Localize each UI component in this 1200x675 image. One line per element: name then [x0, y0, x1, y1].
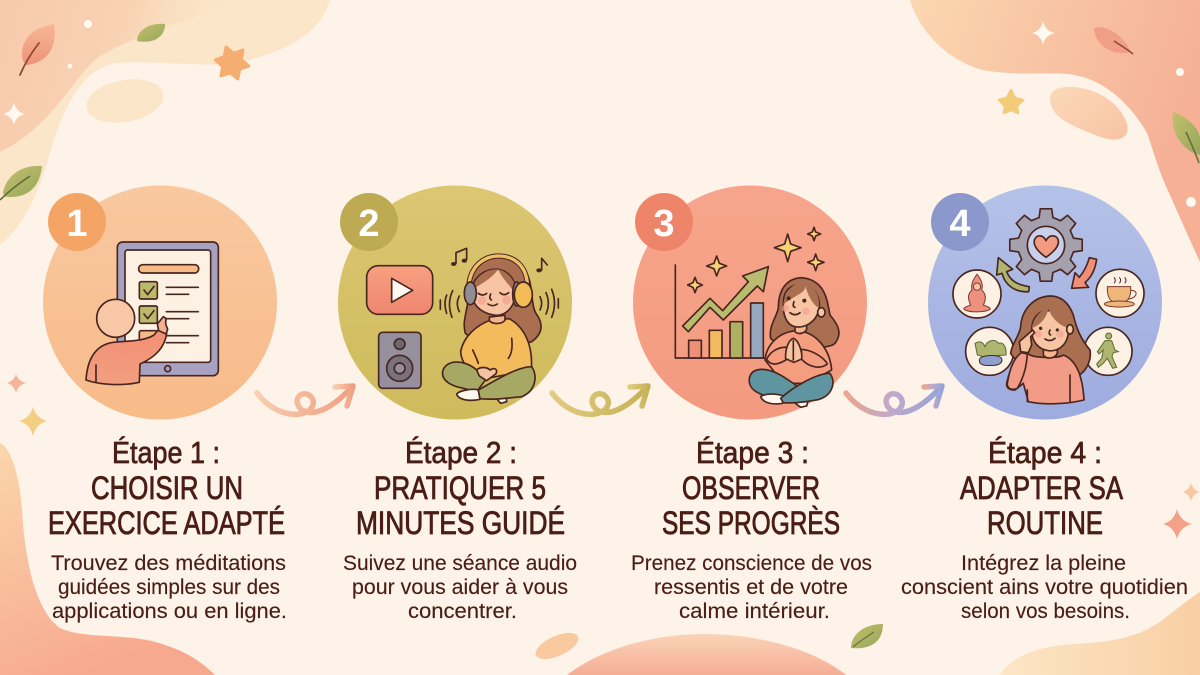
text: step 4: Étape 4 :	[988, 435, 1102, 470]
stars	[688, 227, 824, 293]
sound waves	[440, 289, 558, 317]
step 4 circle	[928, 186, 1162, 420]
sparkle left peach	[7, 374, 26, 393]
text: step 2: MINUTES GUIDÉ	[356, 505, 565, 541]
blob: bottom right	[1000, 592, 1200, 675]
arrow 3 to 4	[846, 386, 942, 414]
speaker	[379, 332, 421, 388]
text: step 1: EXERCICE ADAPTÉ	[48, 505, 285, 541]
illustration: adaptive routine	[953, 209, 1144, 404]
text: step 3: ressentis et de votre	[654, 575, 848, 599]
text: step 1: CHOISIR UN	[91, 470, 243, 506]
text: step 3: Prenez conscience de vos	[631, 551, 872, 575]
step 2 circle	[338, 186, 572, 420]
icon: star yellow	[999, 90, 1023, 113]
dot right	[1186, 197, 1196, 207]
sparkle right peach	[1183, 483, 1199, 501]
screen	[125, 250, 211, 362]
text: step 4: ADAPTER SA	[960, 470, 1124, 506]
badge 4: 4	[949, 203, 971, 245]
illustration: progress chart	[675, 227, 839, 407]
leaf: salmon top left	[20, 24, 55, 75]
girl	[749, 278, 839, 407]
blob: bottom left	[0, 443, 215, 675]
text: step 3: SES PROGRÈS	[662, 505, 840, 541]
gear	[1010, 209, 1082, 281]
badge 3: 3	[653, 203, 675, 245]
text: step 2: Suivez une séance audio	[343, 551, 577, 575]
cup icon	[1096, 269, 1144, 317]
dot top right	[1176, 68, 1184, 76]
blob: bottom centre	[567, 634, 846, 675]
check 3	[139, 331, 198, 348]
music notes	[451, 248, 547, 272]
arrow 2 to 3	[552, 386, 648, 414]
sparkle top left	[3, 102, 25, 125]
text: step 2	[343, 435, 577, 623]
play icon	[367, 266, 433, 314]
blob: top right	[910, 0, 1200, 262]
text: step 1: Trouvez des méditations	[51, 551, 286, 575]
step 1 circle	[43, 186, 277, 420]
leaf: green top	[137, 24, 165, 42]
text: step 4: Intégrez la pleine	[961, 551, 1126, 575]
dot top left	[84, 20, 92, 28]
sparkle right salmon	[1163, 509, 1192, 539]
tablet	[117, 242, 218, 376]
trend arrow	[683, 267, 768, 332]
girl	[443, 255, 541, 403]
badge 2: 2	[358, 203, 380, 245]
check 2	[139, 306, 198, 323]
illustration: tablet checklist with person	[86, 242, 218, 385]
leaf: green right	[1173, 112, 1200, 163]
walking icon	[1084, 327, 1132, 375]
blob: top left island	[83, 74, 167, 128]
blob: top left	[0, 0, 330, 245]
sparkle left yellow	[19, 407, 47, 436]
badge 1	[48, 193, 106, 251]
arrow green	[997, 258, 1029, 292]
text: step 2: pour vous aider à vous	[352, 575, 568, 599]
leaf: salmon top right	[1094, 27, 1133, 54]
icon: star top left	[215, 47, 249, 79]
text: step 2: PRATIQUER 5	[374, 470, 546, 506]
text: step 4: selon vos besoins.	[961, 599, 1130, 623]
axes	[675, 265, 764, 358]
text: step 3	[631, 435, 872, 623]
text: step 2: concentrer.	[408, 599, 517, 623]
text: step 1: guidées simples sur des	[58, 575, 280, 599]
leaf: bottom	[851, 624, 883, 648]
badge 3	[635, 193, 693, 251]
arrow 1 to 2	[257, 386, 353, 414]
text: step 1: Étape 1 :	[112, 435, 220, 470]
illustration: audio listening	[367, 248, 558, 403]
plant icon	[966, 327, 1014, 375]
badge 1: 1	[66, 203, 88, 245]
sparkle top right	[1032, 21, 1055, 45]
text: step 2: Étape 2 :	[405, 435, 517, 470]
home button	[165, 366, 171, 372]
title bar	[139, 265, 199, 273]
text: step 3: calme intérieur.	[679, 599, 830, 623]
yoga icon	[953, 270, 1001, 318]
text: step 3: OBSERVER	[682, 470, 820, 506]
check 1	[139, 282, 198, 299]
badge 2	[340, 193, 398, 251]
text: step 1	[48, 435, 287, 623]
arrow red	[1072, 258, 1097, 288]
text: step 3: Étape 3 :	[696, 435, 809, 470]
text: step 4	[901, 435, 1188, 623]
text: step 4: conscient ains votre quotidien	[901, 575, 1188, 599]
person	[86, 299, 168, 385]
blob: top right island	[1050, 87, 1128, 140]
blob: top left corner	[0, 0, 240, 152]
blob: small bottom ellipse	[532, 628, 582, 664]
bars	[689, 303, 763, 358]
dot top left small	[68, 64, 72, 68]
leaf: green left	[0, 166, 42, 200]
girl	[1007, 296, 1090, 404]
text: step 4: ROUTINE	[987, 505, 1103, 541]
badge 4	[931, 193, 989, 251]
step 3 circle	[633, 186, 867, 420]
text: step 1: applications ou en ligne.	[52, 599, 287, 623]
